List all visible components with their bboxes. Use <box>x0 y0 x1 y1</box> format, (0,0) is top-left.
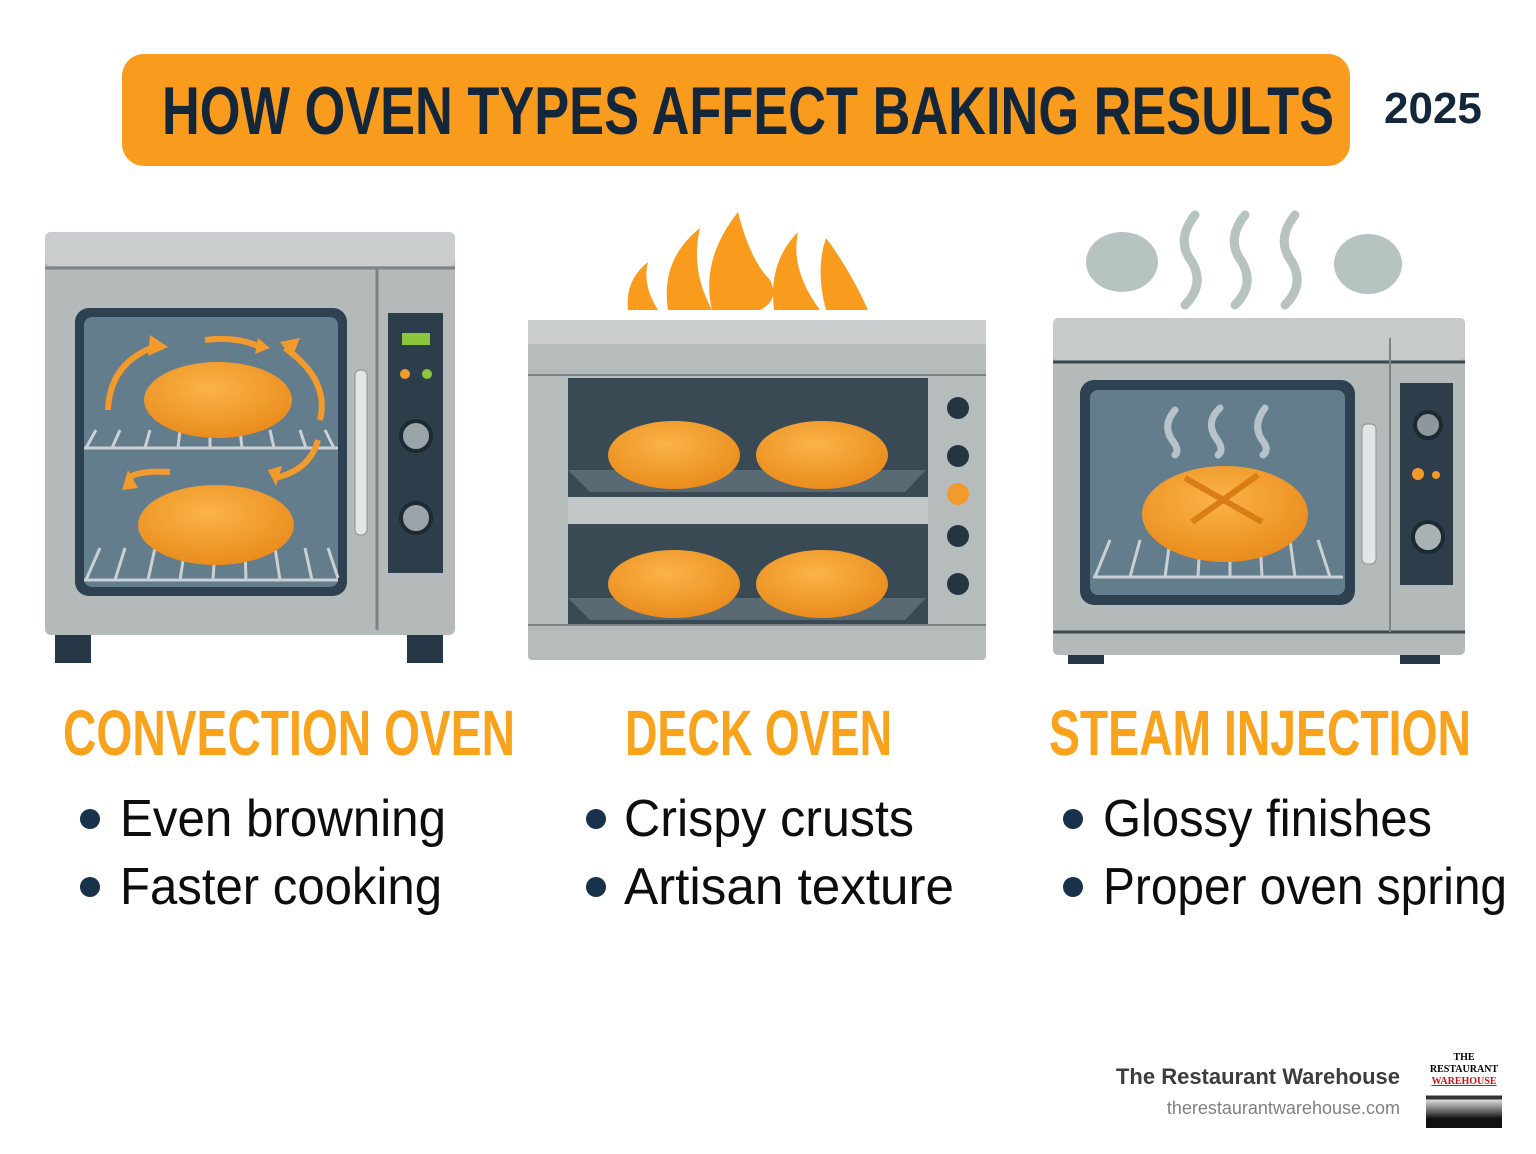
list: steam benefits: Proper oven spring <box>1103 858 1507 916</box>
year: 2025 <box>1384 84 1482 133</box>
list: deck benefits: Crispy crusts <box>624 790 914 848</box>
logo: RESTAURANT <box>1430 1064 1498 1075</box>
heading: convection oven: CONVECTION OVEN <box>63 697 515 769</box>
footer brand text <box>1116 1064 1400 1118</box>
list: steam benefits <box>1063 790 1507 916</box>
list: deck benefits <box>586 790 954 916</box>
logo: WAREHOUSE <box>1431 1076 1496 1087</box>
icon: flames <box>628 212 868 310</box>
footer brand text: The Restaurant Warehouse <box>1116 1064 1400 1089</box>
list: convection benefits <box>80 790 446 916</box>
title banner <box>122 54 1350 166</box>
footer brand text: therestaurantwarehouse.com <box>1167 1098 1400 1118</box>
text: oven labels and benefit lists <box>63 697 1507 916</box>
list: steam benefits: Glossy finishes <box>1103 790 1432 848</box>
logo <box>1426 1052 1502 1128</box>
list: deck benefits: Artisan texture <box>624 858 954 916</box>
oven: deck <box>528 320 986 660</box>
logo: THE <box>1453 1052 1475 1063</box>
list: convection benefits: Even browning <box>120 790 446 848</box>
heading: deck oven: DECK OVEN <box>625 697 892 769</box>
illustration: ovens <box>45 210 1465 664</box>
oven: convection <box>45 232 455 663</box>
oven: steam injection <box>1053 318 1465 664</box>
list: convection benefits: Faster cooking <box>120 858 442 916</box>
icon: steam puffs <box>1086 215 1402 305</box>
